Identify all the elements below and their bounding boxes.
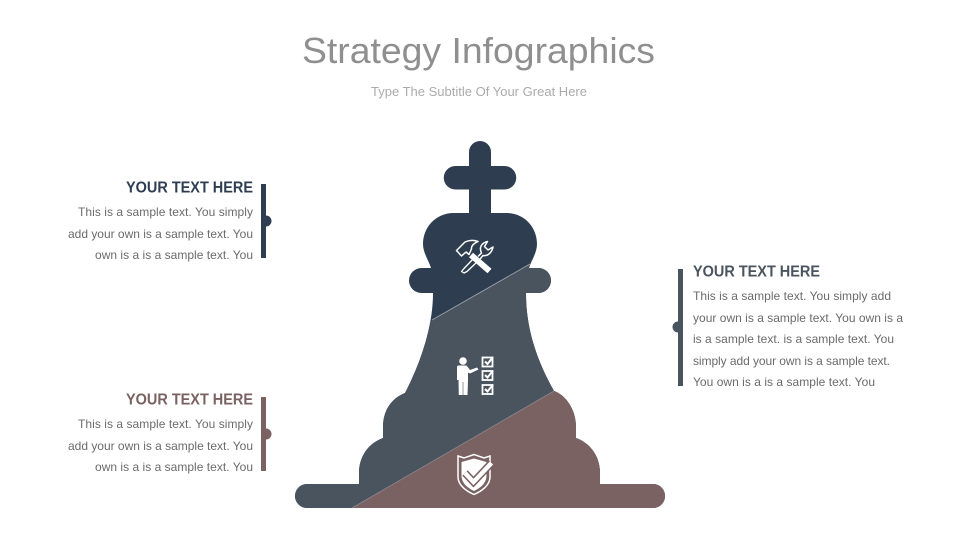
body text [68,417,253,474]
segment: middle slate [295,264,665,508]
body text: your own is a sample text. You own is a [693,311,903,325]
heading: YOUR TEXT HERE [126,392,253,408]
body text: This is a sample text. You simply add [693,289,891,303]
icon: presenter with checklist [457,357,493,395]
icon: shield with check [458,454,492,494]
segment: top navy [295,141,665,508]
icon: hammer and wrench [456,240,493,273]
marker bar [672,269,683,386]
body text: You own is a is a sample text. You [693,375,875,389]
segment: bottom brown [352,391,665,508]
body text [68,205,253,262]
segment dividers [352,264,554,508]
heading: YOUR TEXT HERE [126,180,253,196]
body text: own is a is a sample text. You [95,248,253,262]
panel: bottom left text [68,392,272,474]
body text: is a sample text. is a sample text. You [693,332,894,346]
body text: This is a sample text. You simply [78,205,253,219]
chess king chart [295,141,665,508]
body text: add your own is a sample text. You [68,439,253,453]
body text: add your own is a sample text. You [68,227,253,241]
marker bar [261,184,272,258]
body text: own is a is a sample text. You [95,460,253,474]
body text: This is a sample text. You simply [78,417,253,431]
heading: YOUR TEXT HERE [693,264,820,280]
panel: right text [672,264,903,389]
body text: simply add your own is a sample text. [693,354,890,368]
panel: top left text [68,180,272,262]
title: Strategy Infographics [302,30,655,71]
marker bar [261,397,272,471]
subtitle: Type The Subtitle Of Your Great Here [371,84,587,99]
body text [693,289,903,389]
